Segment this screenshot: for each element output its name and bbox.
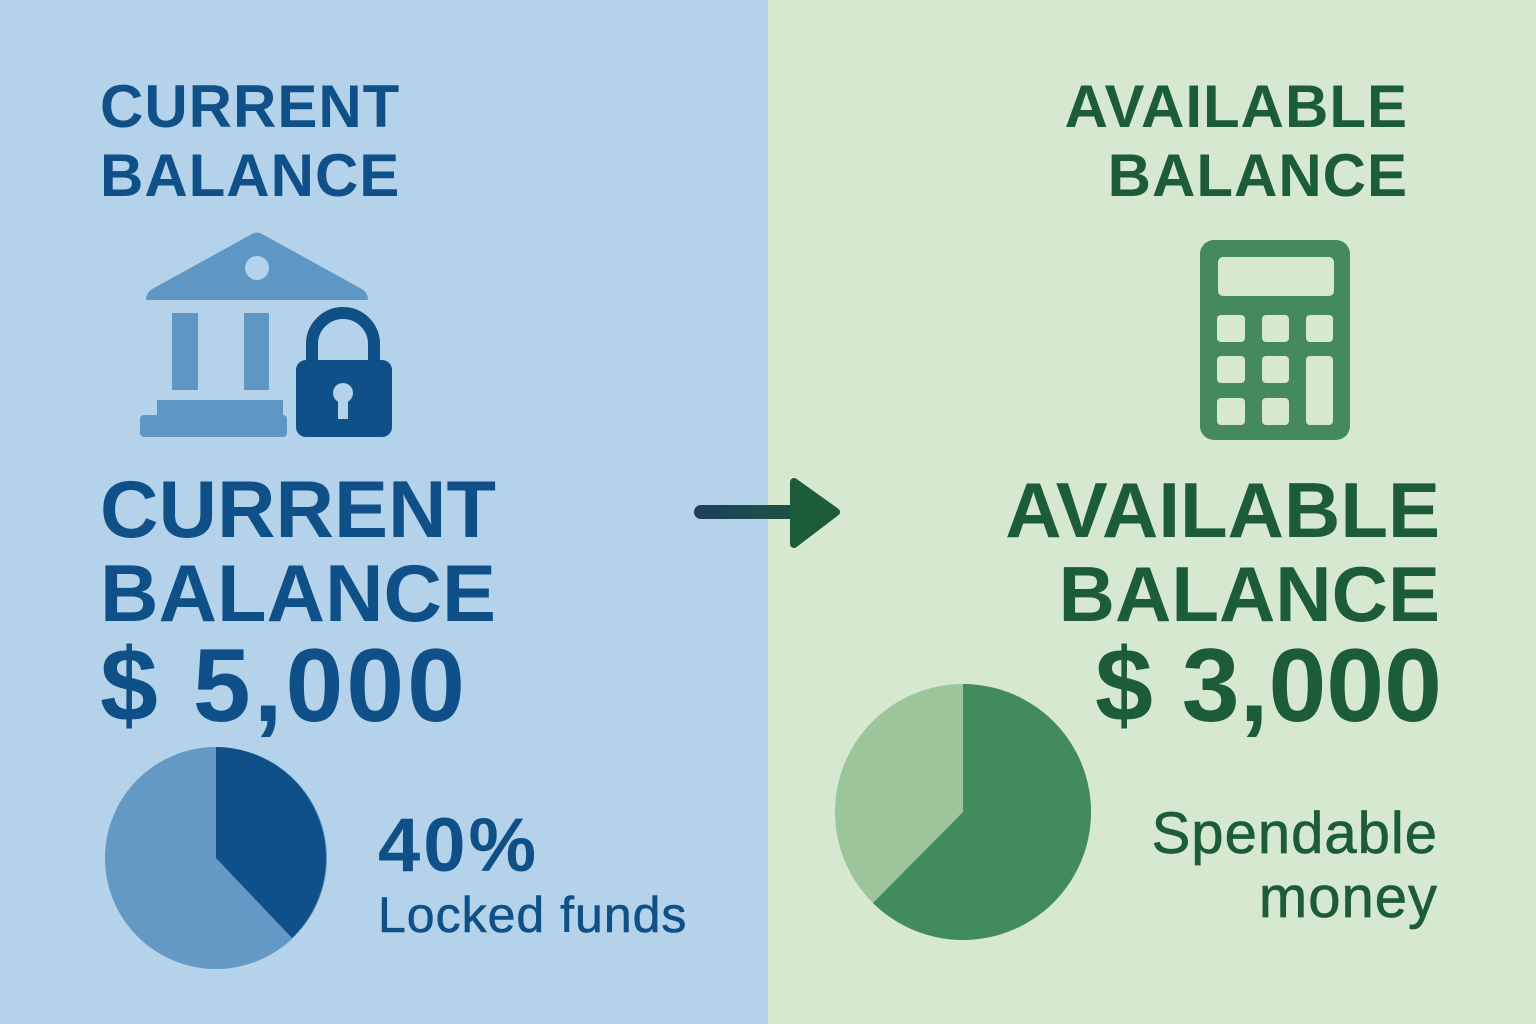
pie chart: spendable — [835, 684, 1091, 940]
heading: available balance: AVAILABLE — [1065, 73, 1408, 140]
heading: current balance: BALANCE — [100, 142, 400, 209]
panel: available balance — [768, 0, 1536, 1024]
text: spendable money: money — [1259, 865, 1438, 930]
panel: current balance — [0, 0, 768, 1024]
big label: available balance — [1005, 466, 1440, 638]
pie chart: 40% locked — [105, 747, 327, 969]
icon: bank with lock — [140, 232, 392, 437]
big label: current balance: CURRENT — [100, 465, 496, 555]
heading: current balance — [100, 73, 400, 209]
amount: $5,000: $ 5,000 — [100, 628, 468, 744]
text: spendable money — [1152, 801, 1438, 930]
big label: available balance: AVAILABLE — [1005, 466, 1440, 554]
heading: current balance: CURRENT — [100, 73, 400, 140]
big label: available balance: BALANCE — [1059, 550, 1440, 638]
text: spendable money: Spendable — [1152, 801, 1438, 866]
arrow — [694, 478, 840, 548]
big label: current balance: BALANCE — [100, 549, 496, 639]
text: 40% locked funds: 40% — [378, 803, 539, 888]
amount: $3,000: $ 3,000 — [1095, 628, 1442, 744]
heading: available balance — [1065, 73, 1408, 209]
icon: calculator — [1200, 240, 1350, 440]
big label: current balance — [100, 465, 496, 639]
text: 40% locked funds: Locked funds — [378, 887, 687, 943]
heading: available balance: BALANCE — [1108, 142, 1408, 209]
text: 40% locked funds — [378, 803, 687, 943]
